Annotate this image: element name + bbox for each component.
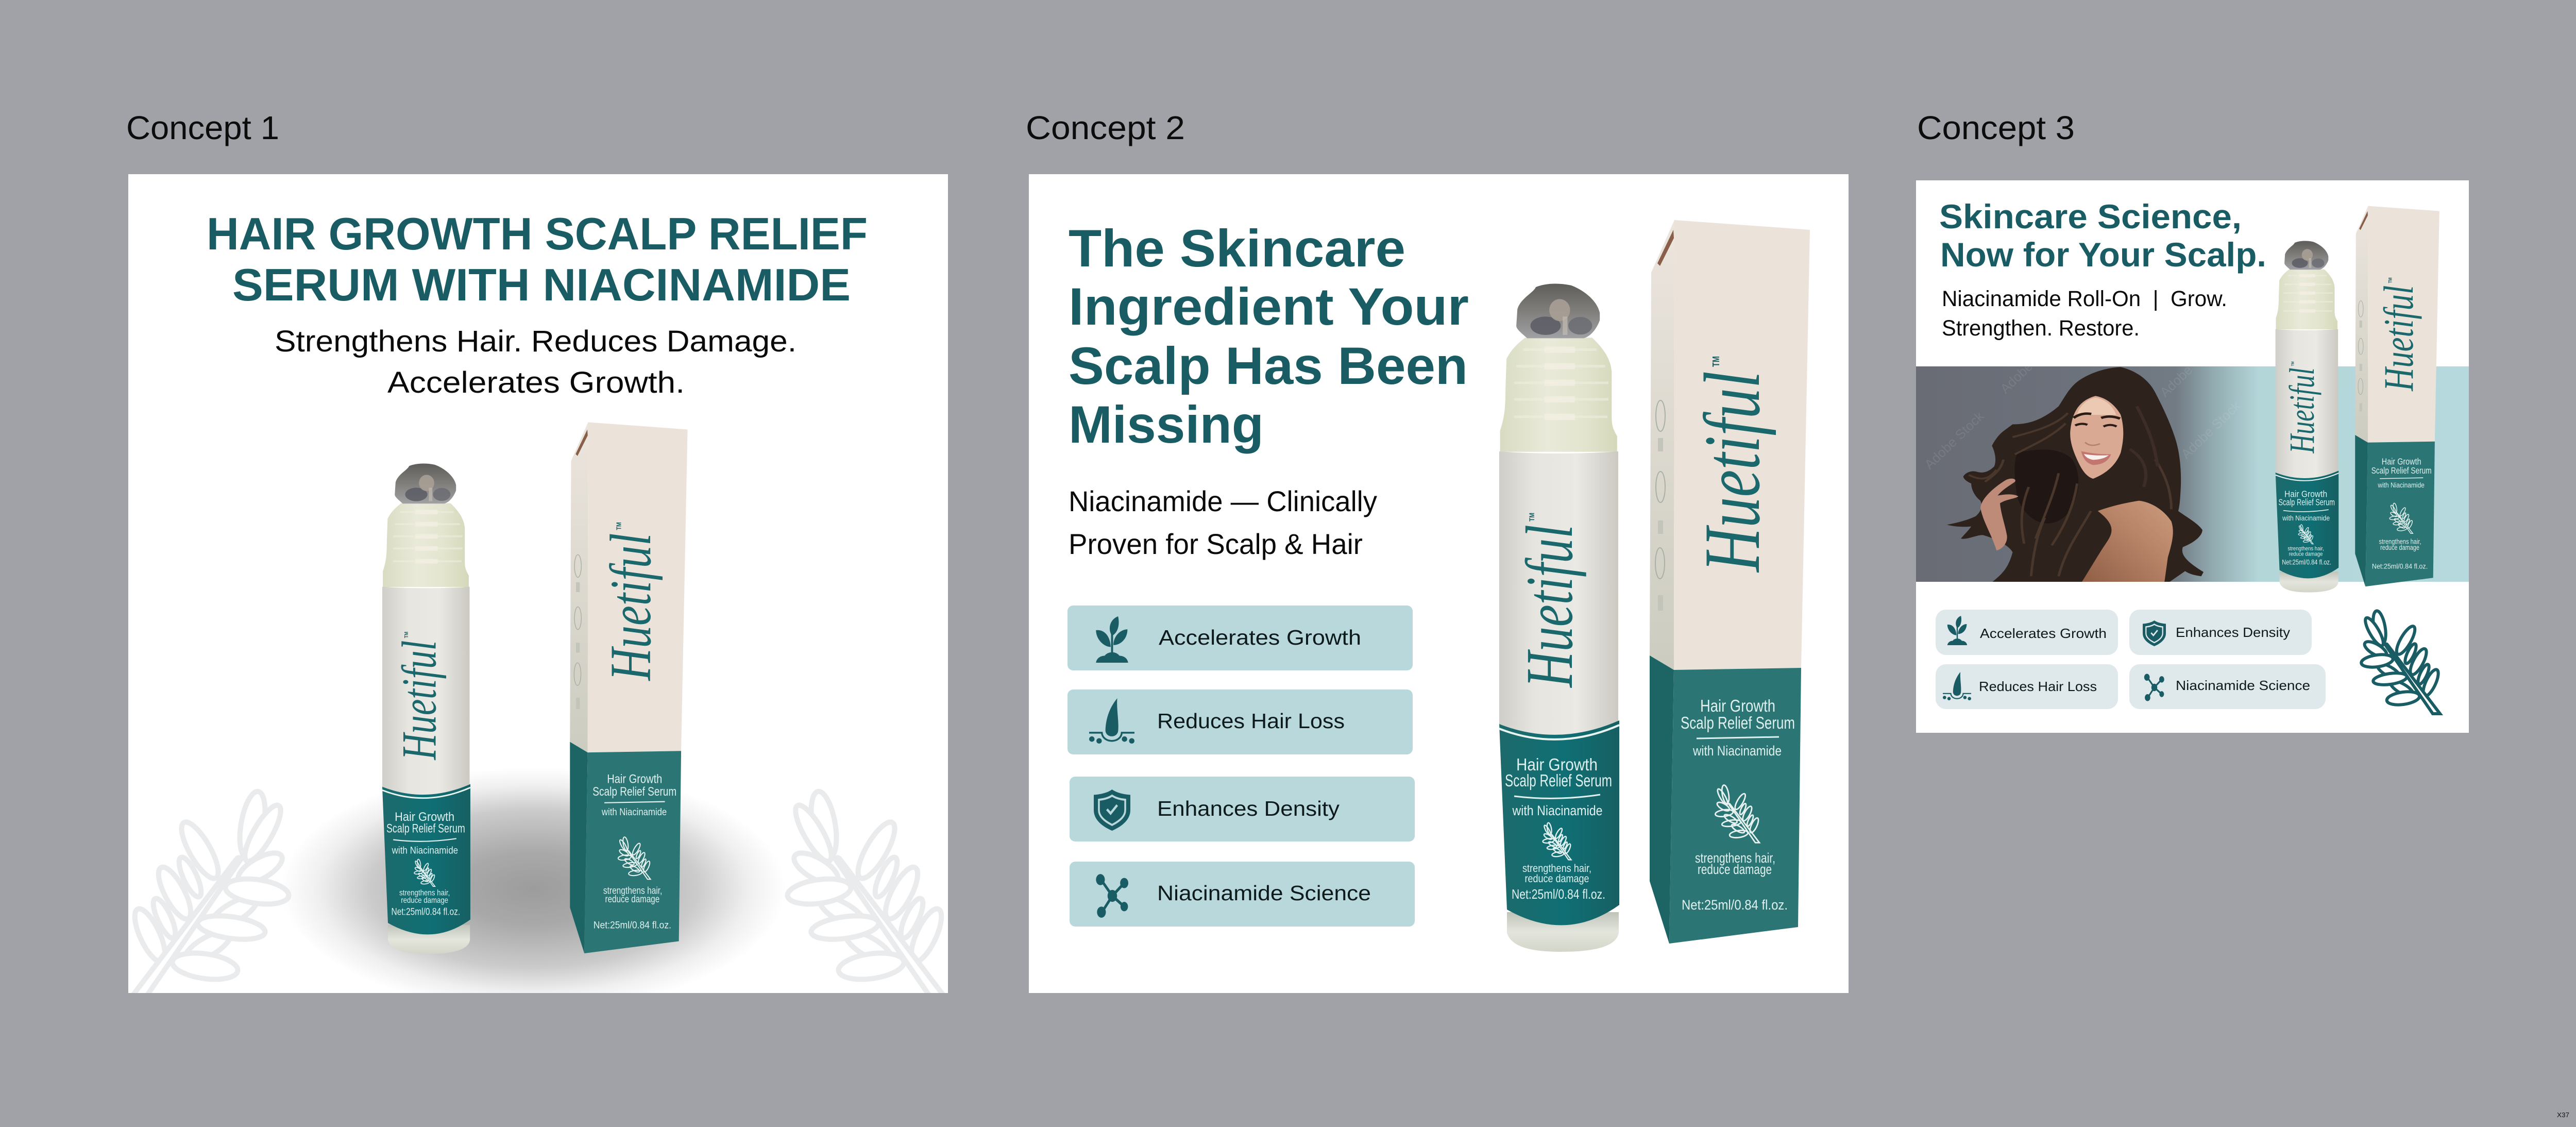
product: box: TM [1711, 356, 1721, 367]
title [1939, 197, 2266, 274]
title: The Skincare [1069, 219, 1405, 278]
subtitle: Strengthen. Restore. [1942, 316, 2140, 341]
product: roller bottle: strengthens hair, [399, 888, 450, 897]
benefit: Niacinamide Science: Niacinamide Science [1157, 881, 1371, 905]
photo: woman with long hair [1926, 366, 2227, 582]
stock photo watermarks [1921, 359, 2244, 472]
product: box: reduce damage [605, 894, 659, 905]
benefit: Enhances Density [1070, 777, 1415, 842]
icon: molecule [1096, 874, 1128, 918]
panel: concept 2 [1029, 174, 1849, 993]
product: box: Huetiful [2375, 285, 2422, 392]
benefit: Accelerates Growth: Accelerates Growth [1980, 626, 2107, 641]
benefit: Accelerates Growth [1936, 610, 2118, 655]
product: box: Hair Growth [2382, 456, 2421, 466]
product: box: Scalp Relief Serum [2371, 465, 2432, 476]
shoulder [2081, 501, 2173, 582]
benefit: Reduces Hair Loss: Reduces Hair Loss [1979, 679, 2097, 694]
benefit: Enhances Density [2129, 610, 2312, 655]
stock photo watermarks: Adobe Stock [2178, 398, 2244, 462]
product: box: Net:25ml/0.84 fl.oz. [594, 920, 671, 931]
eyes [2075, 424, 2116, 427]
product: roller bottle: with Niacinamide [1512, 803, 1602, 818]
icon: hair follicle [1089, 698, 1134, 744]
title: Scalp Has Been [1069, 337, 1468, 395]
title: Missing [1069, 395, 1264, 454]
product: box: reduce damage [1698, 862, 1772, 877]
subtitle [1942, 287, 2227, 341]
subtitle [275, 325, 796, 399]
product: roller bottle: reduce damage [2289, 551, 2323, 558]
product: roller bottle: Net:25ml/0.84 fl.oz. [392, 907, 460, 918]
product: roller bottle [382, 464, 470, 954]
stock photo watermarks: Adobe [1997, 359, 2036, 396]
product: box [570, 422, 688, 953]
product: roller bottle: Scalp Relief Serum [386, 822, 465, 836]
icon: sprout [1096, 616, 1128, 663]
title [1069, 219, 1469, 454]
product: box: with Niacinamide [2378, 481, 2425, 490]
panel background [128, 174, 948, 993]
product: box [1650, 220, 1810, 944]
hair shading [2014, 449, 2078, 524]
benefit: Accelerates Growth [1067, 605, 1413, 670]
heading: Concept 1: Concept 1 [126, 109, 279, 146]
product: roller bottle: Scalp Relief Serum [1505, 771, 1612, 790]
product: roller bottle [1499, 283, 1619, 952]
product: box: Hair Growth [607, 772, 662, 786]
title: HAIR GROWTH SCALP RELIEF [207, 208, 868, 259]
heading: Concept 2: Concept 2 [1026, 109, 1185, 146]
title: Now for Your Scalp. [1940, 236, 2266, 274]
product: box: strengthens hair, [603, 885, 662, 897]
icon: shield [1094, 789, 1130, 831]
product: roller bottle: strengthens hair, [2287, 546, 2324, 552]
subtitle [1069, 485, 1377, 560]
panel background [1916, 180, 2469, 733]
icon: sprout [1947, 616, 1967, 645]
benefit: Enhances Density: Enhances Density [2176, 625, 2290, 640]
title [207, 208, 868, 310]
benefit: Niacinamide Science [1070, 862, 1415, 927]
mouth [2081, 451, 2111, 465]
hair mass [1947, 367, 2204, 582]
product: box: Net:25ml/0.84 fl.oz. [1682, 897, 1788, 913]
panel: concept 1 [128, 174, 948, 1010]
decorative leaf left [129, 789, 291, 997]
product: box: Scalp Relief Serum [1681, 713, 1795, 732]
icon: molecule [2144, 674, 2164, 701]
icon: large leaf outline [2361, 610, 2441, 714]
product: roller bottle [2276, 241, 2338, 593]
photo band [1916, 366, 2469, 582]
benefit: Niacinamide Science: Niacinamide Science [2176, 678, 2310, 693]
product: roller bottle: reduce damage [401, 896, 448, 905]
product: box: TM [2387, 277, 2393, 283]
benefit: Reduces Hair Loss: Reduces Hair Loss [1157, 709, 1345, 733]
product: box: with Niacinamide [1692, 743, 1782, 759]
product: roller bottle: TM [404, 632, 410, 638]
product: roller bottle: Net:25ml/0.84 fl.oz. [1512, 886, 1605, 902]
stock photo watermarks: Adobe [2157, 362, 2195, 400]
hair highlights [1969, 413, 2172, 576]
icon: shield [2143, 620, 2166, 646]
decorative leaf right [786, 789, 947, 997]
product: box: with Niacinamide [601, 806, 667, 818]
product: roller bottle: strengthens hair, [1522, 863, 1591, 874]
heading: Concept 3: Concept 3 [1917, 109, 2075, 146]
product: roller bottle: Huetiful [392, 641, 446, 761]
benefit: Reduces Hair Loss [1067, 689, 1413, 754]
hand [1980, 479, 2019, 550]
product: box: Net:25ml/0.84 fl.oz. [2372, 562, 2428, 570]
benefit: Reduces Hair Loss [1936, 664, 2118, 709]
product shadow [300, 777, 767, 993]
benefit: Niacinamide Science [2129, 664, 2326, 709]
product: roller bottle: Huetiful [1513, 525, 1587, 688]
subtitle: Niacinamide — Clinically [1069, 485, 1377, 517]
subtitle: Proven for Scalp & Hair [1069, 528, 1363, 560]
subtitle: Niacinamide Roll-On | Grow. [1942, 287, 2227, 311]
face [2070, 396, 2123, 479]
eyebrows [2074, 414, 2120, 418]
product: box: Huetiful [1688, 371, 1776, 573]
product: roller bottle: with Niacinamide [2282, 514, 2330, 523]
product: roller bottle: TM [1528, 513, 1536, 522]
title: Ingredient Your [1069, 277, 1469, 336]
panel: concept 3 [1916, 180, 2469, 733]
product: box: reduce damage [2380, 544, 2419, 552]
subtitle: Strengthens Hair. Reduces Damage. [275, 325, 796, 358]
title: Skincare Science, [1939, 197, 2242, 236]
footer code: X37 [2557, 1111, 2569, 1119]
subtitle: Accelerates Growth. [387, 366, 685, 399]
nose [2085, 442, 2100, 445]
product: box: strengthens hair, [1695, 850, 1775, 866]
product: box: Huetiful [598, 533, 663, 681]
product: roller bottle: Hair Growth [1516, 755, 1598, 774]
product: roller bottle: Hair Growth [2284, 489, 2327, 499]
product: box: Hair Growth [1700, 696, 1775, 715]
icon: hair follicle [1943, 672, 1971, 700]
product: roller bottle: Hair Growth [395, 810, 454, 824]
product: box: TM [615, 522, 622, 530]
product: roller bottle: Huetiful [2282, 367, 2321, 453]
panel background [1029, 174, 1849, 993]
product: roller bottle: Net:25ml/0.84 fl.oz. [2282, 558, 2331, 566]
product: roller bottle: reduce damage [1525, 873, 1589, 885]
product: box: Scalp Relief Serum [592, 785, 676, 799]
benefit: Accelerates Growth: Accelerates Growth [1159, 626, 1361, 649]
product: box [2355, 206, 2439, 586]
product: roller bottle: Scalp Relief Serum [2278, 497, 2335, 508]
product: box: strengthens hair, [2379, 538, 2421, 546]
benefit: Enhances Density: Enhances Density [1157, 797, 1340, 820]
product: roller bottle: with Niacinamide [392, 845, 458, 856]
stock photo watermarks: Adobe Stock [1921, 408, 1987, 472]
product: roller bottle: TM [2290, 361, 2295, 366]
title: SERUM WITH NIACINAMIDE [232, 259, 851, 310]
